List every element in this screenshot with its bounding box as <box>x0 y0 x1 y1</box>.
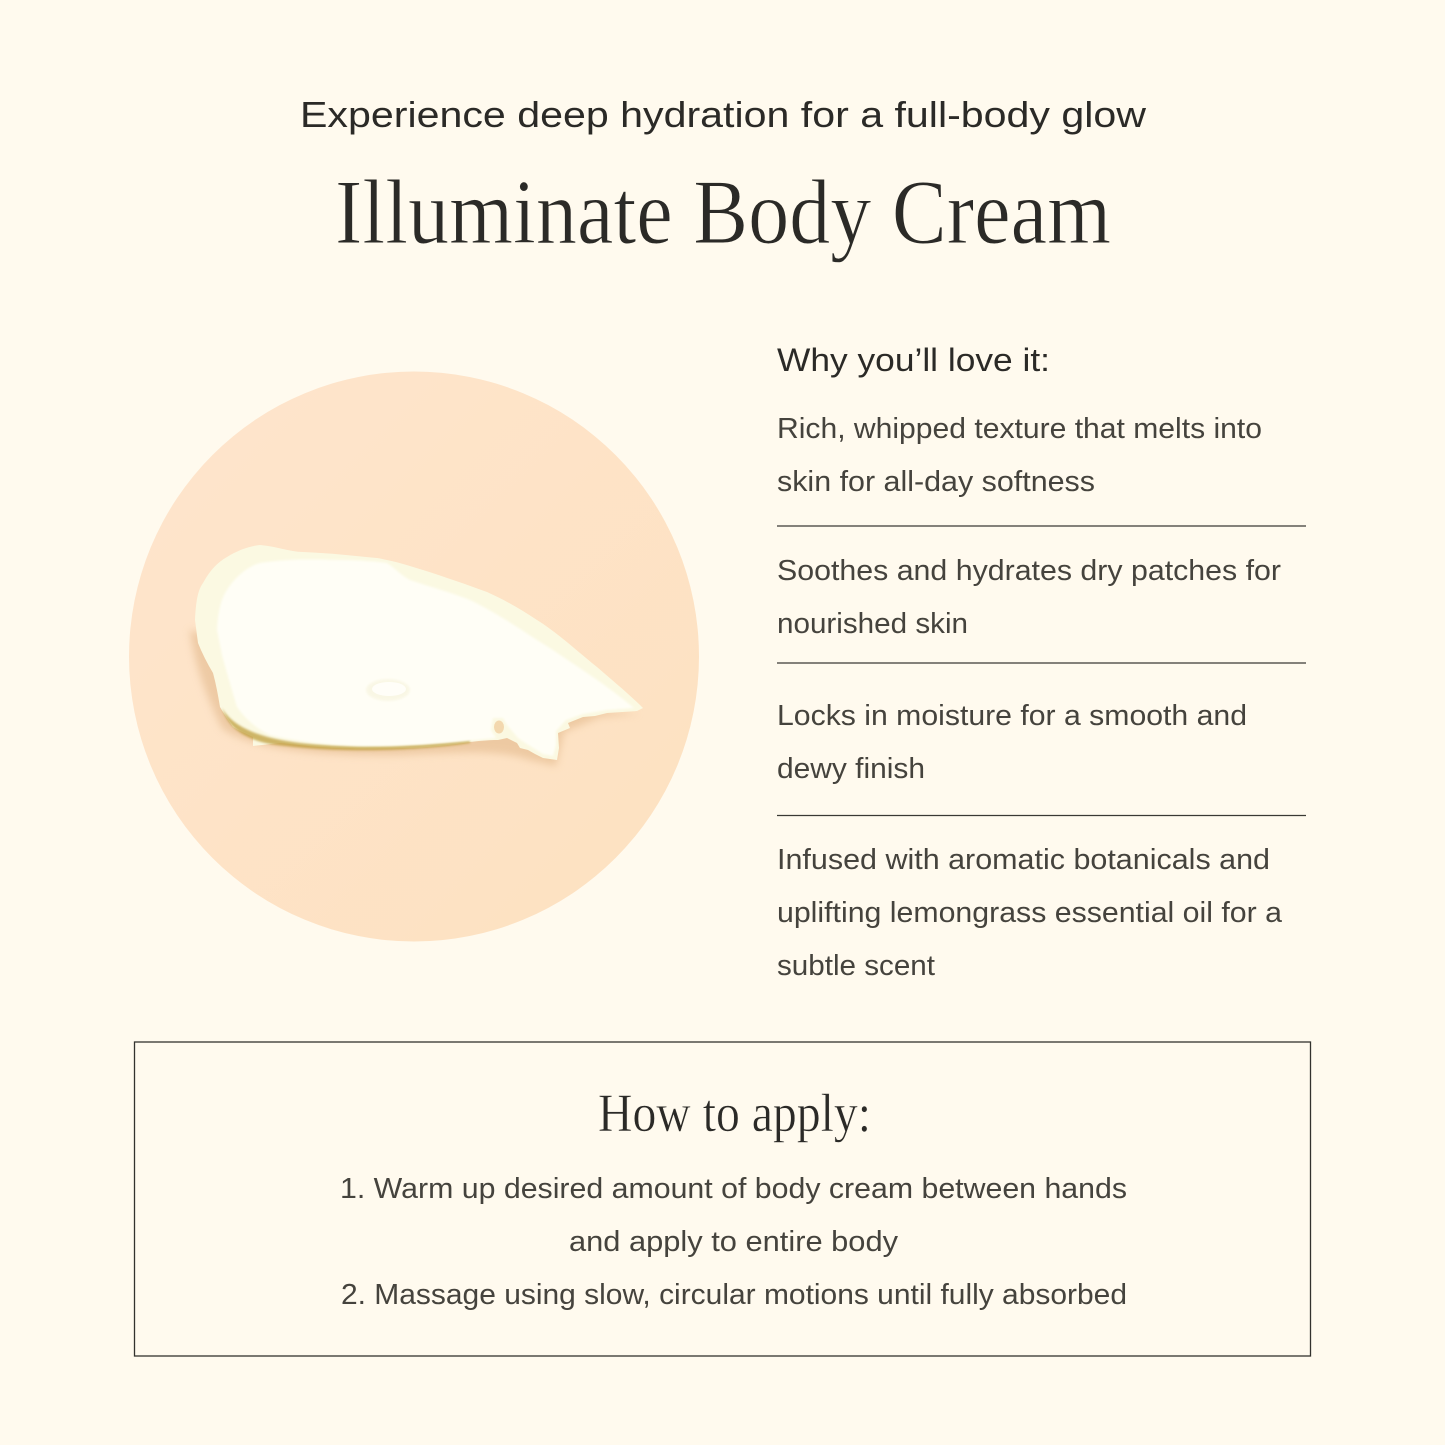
benefit 3: dewy finish <box>777 753 925 785</box>
heading: how to apply: How to apply: <box>598 1083 871 1143</box>
benefit 3: Locks in moisture for a smooth and <box>777 700 1247 732</box>
benefit 2: Soothes and hydrates dry patches for <box>777 555 1282 587</box>
swatch shadow <box>190 630 640 766</box>
benefit 4: Infused with aromatic botanicals and <box>777 844 1270 876</box>
benefit 4: uplifting lemongrass essential oil for a <box>777 897 1282 929</box>
step 2: 2. Massage using slow, circular motions until fully absorbed <box>341 1279 1127 1311</box>
benefit 3 <box>777 700 1247 785</box>
benefit 2 <box>777 555 1282 640</box>
step 1 <box>340 1173 1127 1258</box>
notch <box>494 720 504 734</box>
step 1: and apply to entire body <box>569 1226 899 1258</box>
title: Illuminate Body Cream <box>335 161 1111 263</box>
whipped highlight <box>217 559 634 756</box>
dimple <box>366 679 410 701</box>
benefit 1 <box>777 413 1262 498</box>
benefit 4: subtle scent <box>777 950 935 982</box>
benefit 1: Rich, whipped texture that melts into <box>777 413 1262 445</box>
panel: how to apply <box>134 1042 1310 1356</box>
golden underside <box>222 708 470 750</box>
benefit 2: nourished skin <box>777 608 968 640</box>
step 1: 1. Warm up desired amount of body cream between hands <box>340 1173 1127 1205</box>
benefit 4 <box>777 844 1282 982</box>
benefit 1: skin for all-day softness <box>777 466 1095 498</box>
subtitle: Experience deep hydration for a full-body glow <box>300 94 1147 135</box>
cream swatch <box>195 545 643 760</box>
section heading: why you'll love it: Why you’ll love it: <box>777 342 1050 378</box>
product image: cream swatch in peach circle <box>129 372 699 942</box>
